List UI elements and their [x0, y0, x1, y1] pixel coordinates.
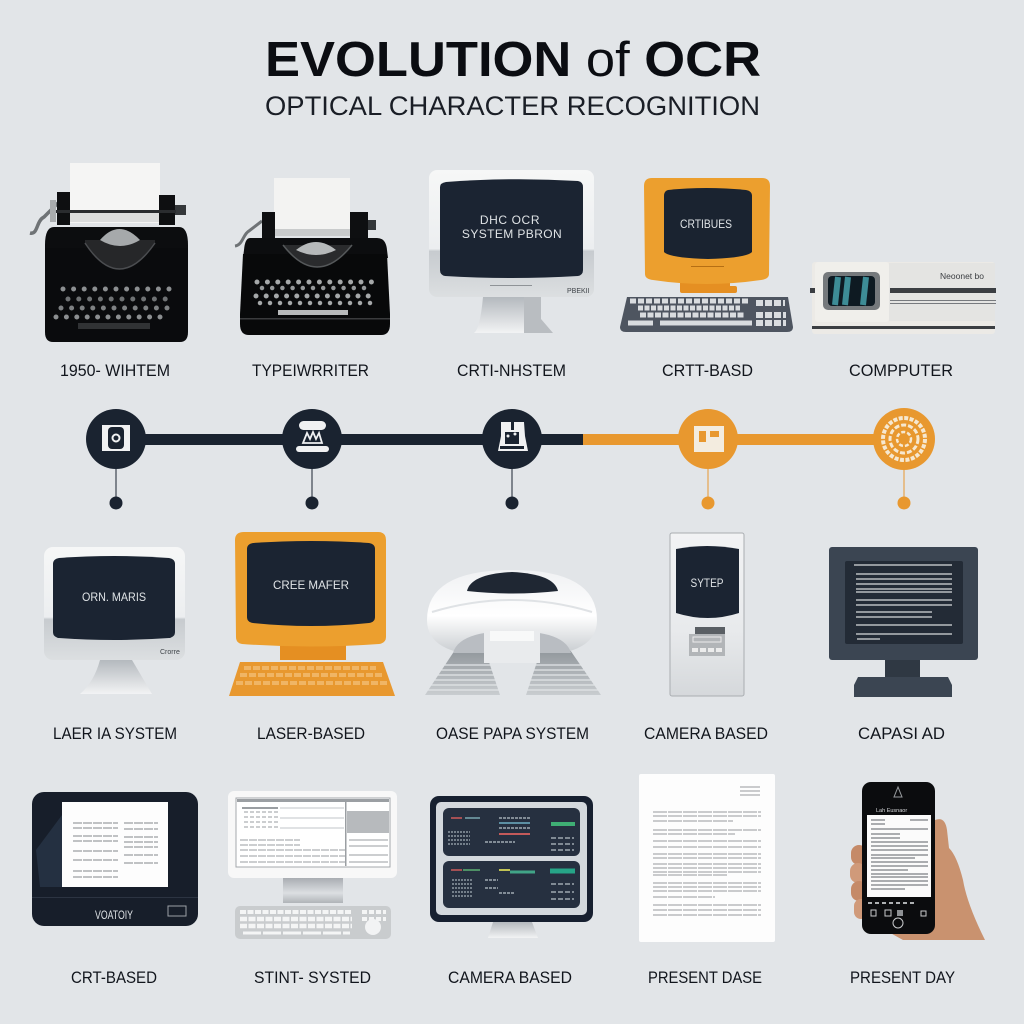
screen text: CRTIBUES	[680, 217, 732, 231]
stage 3 node	[482, 409, 542, 510]
screen text: SYTEP	[690, 576, 724, 590]
row 1 item 2: typewriter	[235, 178, 390, 335]
label: COMPPUTER	[849, 361, 953, 380]
label: CAMERA BASED	[644, 724, 768, 743]
timeline	[86, 408, 935, 510]
row 3 item 1: tablet	[32, 792, 198, 926]
row 1 item 3: white monitor: PBEKII	[567, 288, 590, 295]
row 1 item 5: flat computer	[810, 262, 996, 334]
phone	[862, 782, 935, 934]
label: LASER-BASED	[257, 724, 365, 743]
subtitle: OPTICAL CHARACTER RECOGNITION	[265, 91, 760, 121]
row 2 item 1: white monitor: Crorre	[160, 649, 180, 656]
title: EVOLUTION of OCR	[265, 33, 761, 87]
row 2 item 2: orange computer	[229, 532, 395, 696]
row 1 item 4: orange computer	[620, 178, 793, 332]
keypad	[689, 627, 725, 656]
row 1 item 1: black typewriter	[30, 163, 188, 342]
label: CRT-BASED	[71, 968, 157, 987]
label: TYPEIWRRITER	[252, 361, 369, 380]
row 2 item 1: white monitor	[44, 547, 185, 694]
screen text: DHC OCR	[480, 213, 540, 227]
label: CAMERA BASED	[448, 968, 572, 987]
row 3 item 5: hand holding phone	[850, 782, 985, 940]
label: PRESENT DASE	[648, 968, 762, 987]
label: OASE PAPA SYSTEM	[436, 724, 589, 743]
label: CAPASI AD	[858, 724, 945, 743]
row 2 item 3: dome scanner	[425, 570, 601, 695]
label: CRTT-BASD	[662, 361, 753, 380]
device text: Neoonet bo	[940, 271, 984, 281]
row 3 item 4: paper document	[639, 774, 775, 942]
label: 1950- WIHTEM	[60, 361, 170, 380]
label: PRESENT DAY	[850, 968, 955, 987]
row 2 item 5: dark monitor	[829, 547, 978, 697]
phone: Lah Eusnaor	[876, 808, 907, 814]
screen text: CREE MAFER	[273, 578, 349, 592]
label: CRTI-NHSTEM	[457, 361, 566, 380]
screen text: ORN. MARIS	[82, 590, 146, 604]
stage 5 node	[873, 408, 935, 510]
stage 1 node	[86, 409, 146, 510]
row 2 item 4: tall device	[670, 533, 744, 696]
row 3 item 3: dashboard monitor	[430, 796, 593, 938]
stage 2 node	[282, 409, 342, 510]
device text: VOATOIY	[95, 908, 133, 922]
row 3 item 2: white desktop	[228, 791, 397, 939]
keyboard	[620, 297, 793, 332]
label: STINT- SYSTED	[254, 968, 371, 987]
row 1 item 3: white monitor	[429, 170, 594, 333]
hand	[850, 819, 985, 940]
label: LAER IA SYSTEM	[53, 724, 177, 743]
row 1 item 3: white monitor: SYSTEM PBRON	[462, 227, 562, 241]
stage 4 node	[678, 409, 738, 510]
keyboard	[229, 662, 395, 696]
keyboard	[235, 906, 391, 939]
